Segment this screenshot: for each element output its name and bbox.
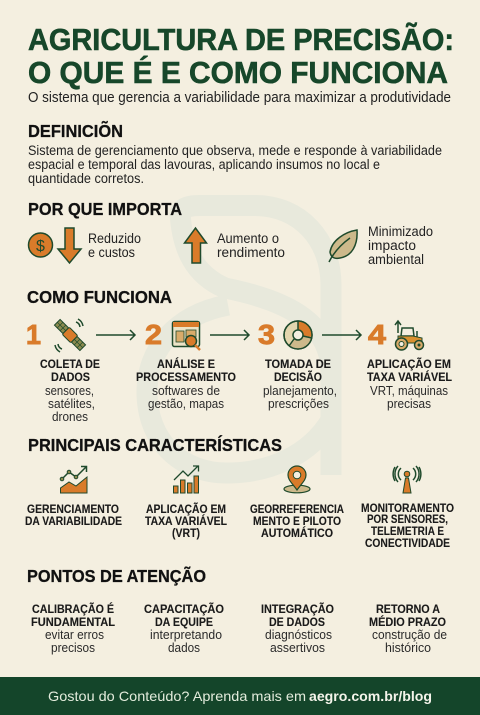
- panel: why it matters: [28, 199, 433, 267]
- feature 2 label: (VRT): [172, 526, 200, 540]
- attention 2: CAPACITAÇÃO: [144, 602, 224, 616]
- step 3 label: planejamento,: [263, 383, 337, 398]
- subtitle: O sistema que gerencia a variabilidade para maximizar a produtividade: [28, 90, 451, 106]
- icon: map pin: [284, 466, 310, 493]
- attention 1: evitar erros: [45, 627, 104, 642]
- feature 1 label: DA VARIABILIDADE: [25, 514, 122, 528]
- icon: coin with dollar: [28, 233, 52, 257]
- feature 3 label: AUTOMÁTICO: [261, 526, 333, 540]
- attention 4: histórico: [385, 640, 431, 655]
- step 2 label: ANÁLISE E: [157, 357, 215, 371]
- feature 4: [361, 466, 454, 550]
- text: environmental impact: Minimizado: [368, 224, 433, 239]
- feature 2 label: [145, 502, 227, 540]
- step 1 label: drones: [52, 409, 88, 424]
- title: [28, 22, 454, 90]
- step 4 label: APLICAÇÃO EM: [367, 357, 451, 371]
- icon: antenna: [393, 466, 421, 493]
- heading: main features: PRINCIPAIS CARACTERÍSTICAS: [28, 434, 282, 455]
- step 4 label: VRT, máquinas: [370, 383, 448, 398]
- feature 1: [25, 466, 122, 528]
- attention 2: dados: [168, 640, 200, 655]
- attention 3: DE DADOS: [269, 615, 325, 629]
- icon: area chart: [60, 466, 87, 493]
- step 2: [136, 319, 236, 411]
- arrow 1 to 2: [96, 330, 135, 340]
- text: reduced costs: Reduzido: [88, 231, 141, 246]
- icon: coin with dollar: $: [36, 238, 45, 255]
- attention 3: [261, 602, 334, 655]
- icon: analysis window: [172, 322, 200, 350]
- text: environmental impact: impacto: [368, 238, 416, 253]
- step 1 label: DADOS: [51, 370, 90, 384]
- feature 3 label: [250, 502, 344, 540]
- step 3 label: DECISÃO: [274, 370, 322, 384]
- attention 2: [144, 602, 224, 655]
- step 2 label: gestão, mapas: [148, 396, 224, 411]
- step 2: 2: [145, 319, 162, 350]
- icon: up arrow: [184, 228, 206, 263]
- attention 1: [31, 602, 115, 655]
- icon: satellite: [54, 319, 86, 352]
- feature 4 label: [361, 501, 454, 550]
- heading: points of attention: PONTOS DE ATENÇÃO: [27, 565, 206, 586]
- text: reduced costs: [88, 231, 141, 260]
- text: environmental impact: [368, 224, 433, 267]
- feature 4 label: MONITORAMENTO: [361, 501, 454, 515]
- arrow 3 to 4: [322, 330, 361, 340]
- footer banner: Gostou do Conteúdo? Aprenda mais em: [48, 688, 306, 704]
- heading: how it works: COMO FUNCIONA: [27, 287, 172, 307]
- step 4 label: TAXA VARIÁVEL: [367, 370, 452, 384]
- title: O QUE É E COMO FUNCIONA: [28, 55, 448, 90]
- attention 1: precisos: [51, 640, 95, 655]
- attention 3: assertivos: [270, 640, 325, 655]
- feature 2: [145, 466, 227, 540]
- text: higher yield: rendimento: [217, 245, 285, 260]
- feature 3 label: GEORREFERENCIA: [250, 502, 344, 516]
- step 1 label: satélites,: [48, 396, 95, 411]
- attention 2: interpretando: [150, 627, 222, 642]
- attention 4: [369, 602, 447, 655]
- definition text: [28, 143, 442, 186]
- step 1 label: COLETA DE: [40, 357, 100, 371]
- footer banner: [0, 677, 480, 715]
- icon: tractor: [395, 321, 424, 350]
- panel: points of attention: [27, 565, 447, 655]
- text: environmental impact: ambiental: [368, 252, 424, 267]
- watermark logo: [147, 206, 331, 475]
- step 1: 1: [26, 319, 41, 350]
- attention 2: DA EQUIPE: [155, 615, 213, 629]
- step 1: [26, 319, 100, 424]
- attention 3: diagnósticos: [265, 627, 332, 642]
- icon: leaf: [329, 230, 357, 262]
- panel: main features: [25, 434, 454, 550]
- feature 3 label: MENTO E PILOTO: [253, 514, 341, 528]
- step 2 label: [136, 357, 236, 411]
- heading: definition: DEFINICIÕN: [28, 120, 123, 141]
- attention 1: CALIBRAÇÃO É: [32, 602, 114, 616]
- step 4 label: [367, 357, 452, 411]
- step 3 label: prescrições: [268, 396, 329, 411]
- definition text: espacial e temporal das lavouras, aplicando insumos no local e: [28, 157, 380, 172]
- attention 4: construção de: [372, 627, 447, 642]
- footer banner: aegro.com.br/blog: [309, 688, 432, 704]
- text: reduced costs: e custos: [88, 245, 135, 260]
- attention 4: MÉDIO PRAZO: [369, 615, 446, 629]
- icon: bar chart: [174, 466, 198, 493]
- text: higher yield: Aumento o: [217, 231, 279, 246]
- feature 1 label: GERENCIAMENTO: [27, 502, 119, 516]
- step 3 label: [263, 357, 337, 411]
- feature 4 label: POR SENSORES,: [367, 512, 448, 526]
- step 2 label: softwares de: [152, 383, 220, 398]
- text: higher yield: [217, 231, 285, 260]
- arrow 2 to 3: [210, 330, 249, 340]
- panel: how it works: [26, 287, 452, 424]
- feature 4 label: CONECTIVIDADE: [365, 536, 450, 550]
- attention 3: INTEGRAÇÃO: [261, 602, 334, 616]
- icon: down arrow: [58, 228, 81, 263]
- step 4: 4: [368, 319, 386, 350]
- attention 1: FUNDAMENTAL: [31, 615, 115, 629]
- feature 1 label: [25, 502, 122, 528]
- title: AGRICULTURA DE PRECISÃO:: [28, 22, 454, 57]
- panel: definition: [28, 120, 442, 186]
- step 3 label: TOMADA DE: [265, 357, 331, 371]
- step 4: [367, 319, 452, 411]
- feature 4 label: TELEMETRIA E: [371, 524, 444, 538]
- step 2 label: PROCESSAMENTO: [136, 370, 236, 384]
- feature 2 label: APLICAÇÃO EM: [146, 502, 226, 516]
- definition text: Sistema de gerenciamento que observa, mede e responde à variabilidade: [28, 143, 442, 158]
- step 1 label: [40, 357, 100, 424]
- step 1 label: sensores,: [45, 383, 94, 398]
- step 3: 3: [258, 319, 275, 350]
- feature 2 label: TAXA VARIÁVEL: [145, 514, 227, 528]
- step 4 label: precisas: [387, 396, 431, 411]
- step 3: [258, 319, 337, 411]
- heading: why it matters: POR QUE IMPORTA: [28, 199, 182, 219]
- attention 4: RETORNO A: [376, 602, 440, 616]
- icon: pie chart: [284, 321, 312, 349]
- definition text: quantidade corretos.: [28, 171, 144, 186]
- feature 3: [250, 466, 344, 540]
